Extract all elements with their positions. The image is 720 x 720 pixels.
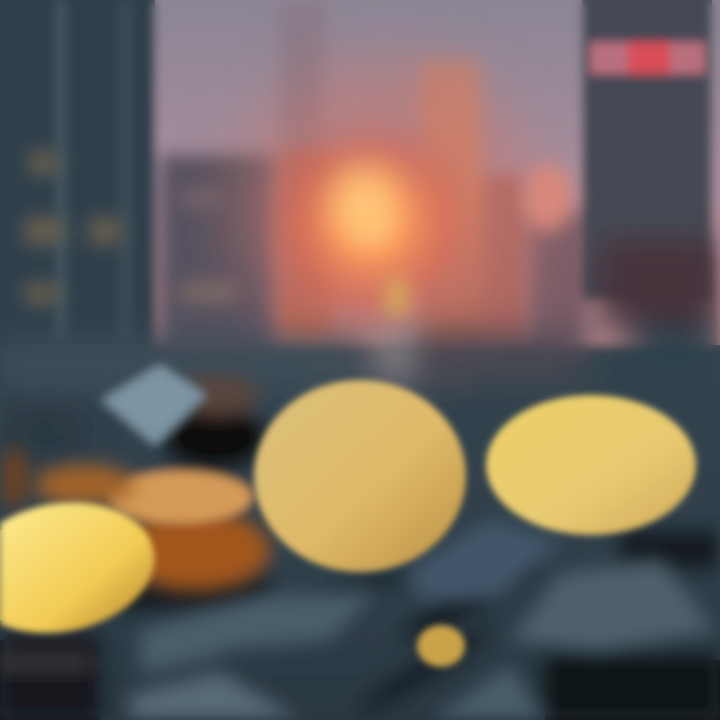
coin: centre: [254, 380, 466, 572]
background: dusk sky: [0, 0, 720, 400]
sunset glow: [235, 60, 572, 360]
foreground: slate blocks: [130, 520, 715, 720]
coin: small: [417, 625, 465, 667]
coin: right: [486, 395, 696, 535]
coin: left bright: [0, 503, 154, 633]
icon: pale diamond tile: [102, 365, 206, 445]
background: lower slate ground: [0, 345, 720, 720]
gold coins: [0, 380, 696, 667]
coin stack: orange: [0, 448, 270, 590]
sign: red glow on right tower: [590, 42, 705, 74]
foreground: dark shapes: [0, 375, 720, 720]
skyline: buildings: [0, 0, 712, 355]
mid-ground haze: [0, 240, 720, 460]
